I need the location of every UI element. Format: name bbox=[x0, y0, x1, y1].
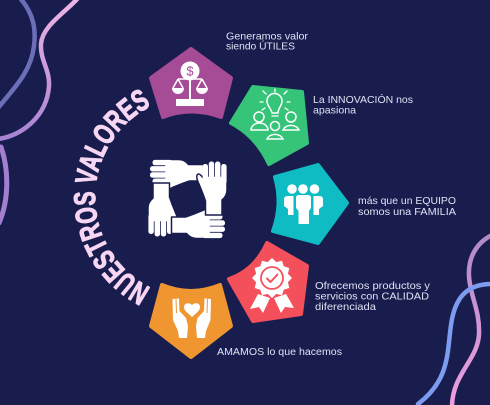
arc title: NUESTROS VALORES bbox=[74, 90, 150, 306]
text: equipo bbox=[358, 195, 456, 218]
text: utiles: Generamos valor bbox=[226, 30, 308, 42]
icon: award ribbon bbox=[250, 258, 294, 313]
text: equipo: más que un EQUIPO bbox=[358, 195, 456, 207]
panel: calidad pentagon bbox=[229, 243, 307, 321]
panel: utiles pentagon bbox=[151, 49, 231, 117]
text: utiles bbox=[226, 30, 308, 52]
icon: three people bbox=[284, 184, 323, 224]
icon: balance scale: $ bbox=[186, 64, 194, 78]
text: calidad: servicios con CALIDAD bbox=[315, 290, 429, 302]
panel: amamos pentagon bbox=[151, 285, 231, 357]
text: innovacion: apasiona bbox=[313, 104, 356, 116]
text: utiles: siendo ÚTILES bbox=[226, 40, 295, 52]
decorative curves: top left bbox=[0, 0, 78, 223]
icon: light bulb and team bbox=[251, 89, 299, 139]
text: calidad: Ofrecemos productos y bbox=[315, 280, 431, 292]
panel: equipo pentagon bbox=[273, 165, 347, 243]
text: innovacion: La INNOVACIÓN nos bbox=[313, 93, 413, 106]
text: calidad bbox=[315, 280, 431, 313]
text: amamos: AMAMOS lo que hacemos bbox=[217, 346, 342, 358]
decorative curves: bottom right bbox=[418, 235, 490, 405]
icon: hands holding heart bbox=[172, 298, 211, 338]
panel: innovacion pentagon bbox=[231, 87, 307, 164]
text: innovacion bbox=[313, 93, 413, 116]
text: calidad: diferenciada bbox=[315, 301, 376, 313]
text: equipo: somos una FAMILIA bbox=[358, 206, 456, 218]
central icon: four joined hands bbox=[148, 160, 227, 238]
